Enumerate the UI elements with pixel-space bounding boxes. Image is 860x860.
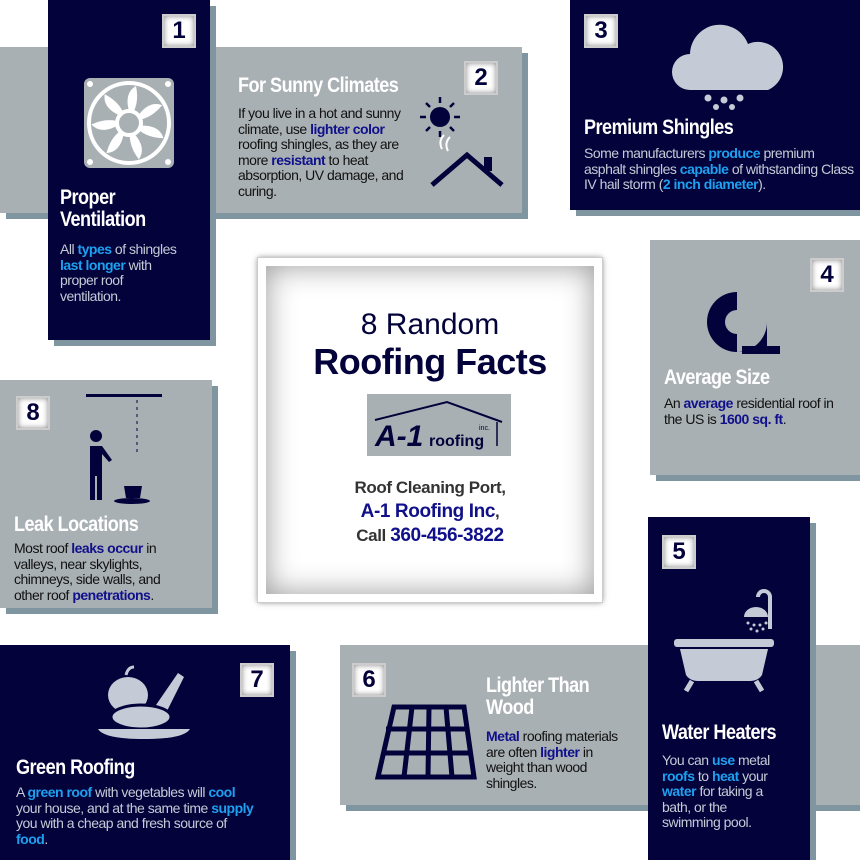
heading 1: Proper <box>60 186 115 209</box>
logo: inc. <box>479 425 490 432</box>
center box <box>258 258 602 602</box>
title: 8 Random <box>361 308 499 341</box>
contact text: Roof Cleaning Port, <box>354 478 506 497</box>
number 8 <box>16 396 50 430</box>
number 7: 7 <box>250 666 264 693</box>
heading 2: For Sunny Climates <box>238 74 398 97</box>
text 7: A green roof with vegetables will cool your house, and at the same time supply you with a cheap and fresh source of food. <box>16 784 253 846</box>
panel 4: average size <box>650 240 860 475</box>
number 5 <box>662 535 696 569</box>
number 8: 8 <box>26 399 40 426</box>
text 4: An average residential roof in the US is 1600 sq. ft. <box>664 395 833 426</box>
logo: A-1 <box>374 420 423 453</box>
text 2: If you live in a hot and sunny climate, use lighter color roofing shingles, as they are more resistant to heat absorption, UV damage, and curing. <box>238 105 403 198</box>
panel 6: lighter than wood <box>340 645 860 805</box>
logo: roofing <box>429 433 484 450</box>
panel 1: proper ventilation <box>48 0 210 340</box>
logo <box>367 394 511 456</box>
heading 3: Premium Shingles <box>584 116 733 139</box>
text 8: Most roof leaks occur in valleys, near skylights, chimneys, side walls, and other roof penetrations. <box>14 540 160 602</box>
number 4 <box>810 258 844 292</box>
number 6 <box>352 663 386 697</box>
contact text <box>354 478 506 546</box>
text 6: Metal roofing materials are often lighter in weight than wood shingles. <box>486 728 618 790</box>
panel 7: green roofing <box>0 645 290 860</box>
number 2: 2 <box>474 64 488 91</box>
text 3: Some manufacturers produce premium asphalt shingles capable of withstanding Class IV hail storm (2 inch diameter). <box>584 145 854 192</box>
title <box>313 308 547 382</box>
heading 8: Leak Locations <box>14 513 138 536</box>
panel 5: water heaters <box>648 517 810 860</box>
panel 3: premium shingles <box>570 0 860 210</box>
number 6: 6 <box>362 666 376 693</box>
number 4: 4 <box>820 261 834 288</box>
heading 6: Wood <box>486 696 534 719</box>
heading 1 <box>60 186 146 231</box>
number 3: 3 <box>594 17 608 44</box>
number 1 <box>162 14 196 48</box>
number 5: 5 <box>672 538 686 565</box>
text 1: All types of shingles last longer with proper roof ventilation. <box>60 241 176 304</box>
icon: bathtub <box>674 589 774 692</box>
heading 6 <box>486 674 589 719</box>
icon: sun and roof <box>420 97 504 187</box>
panel 2: sunny climates <box>0 47 522 213</box>
icon: leak person <box>86 394 162 504</box>
icon: fan <box>84 78 174 168</box>
text 5: You can use metal roofs to heat your water for taking a bath, or the swimming pool. <box>662 752 770 830</box>
icon: vegetables <box>98 666 190 739</box>
number 3 <box>584 14 618 48</box>
heading 5: Water Heaters <box>662 721 776 744</box>
title: Roofing Facts <box>313 341 547 382</box>
contact text: Call 360-456-3822 <box>356 525 504 546</box>
panel 8: leak locations <box>0 380 212 608</box>
heading 4: Average Size <box>664 366 770 389</box>
icon: metal roofing <box>374 704 477 780</box>
icon: tape measure <box>707 292 780 354</box>
heading 1: Ventilation <box>60 208 146 231</box>
heading 6: Lighter Than <box>486 674 589 697</box>
number 7 <box>240 663 274 697</box>
heading 7: Green Roofing <box>16 756 135 779</box>
contact text: A-1 Roofing Inc, <box>361 501 499 522</box>
icon: cloud hail <box>672 24 784 110</box>
number 2 <box>464 61 498 95</box>
number 1: 1 <box>172 17 186 44</box>
